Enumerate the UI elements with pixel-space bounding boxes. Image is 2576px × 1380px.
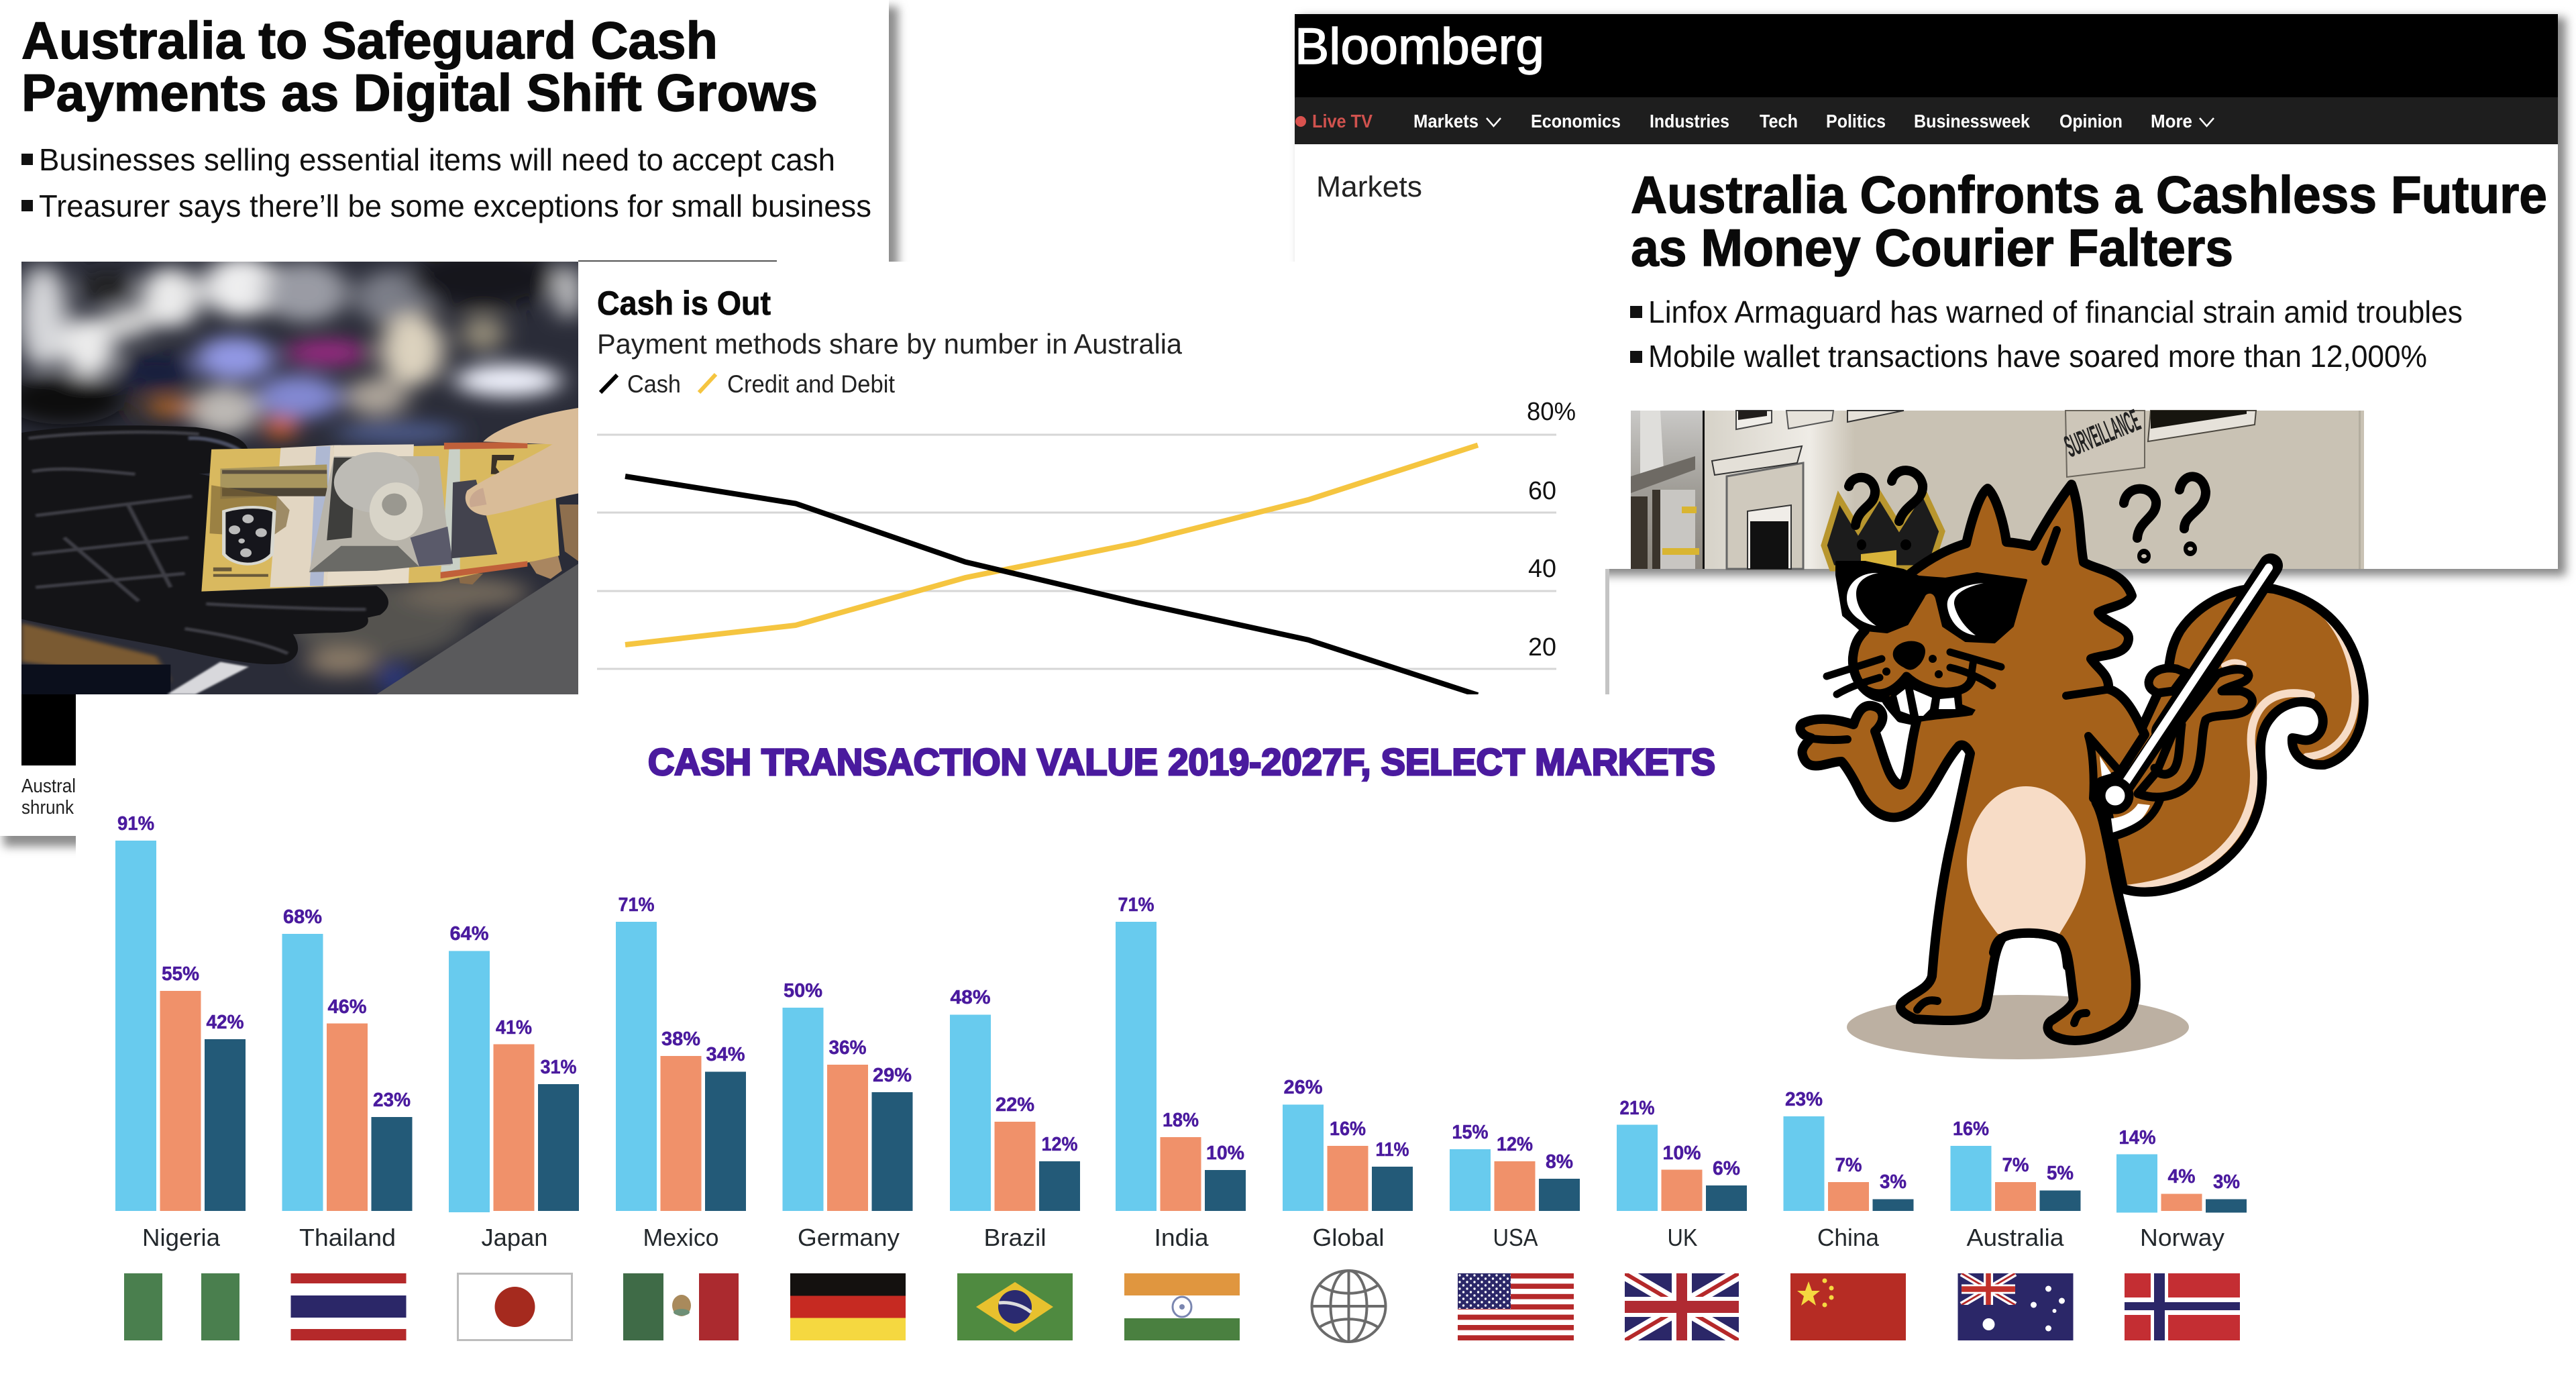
bullet text: Treasurer says there’ll be some exceptions for small business — [39, 189, 871, 223]
group: USA: 8% — [1546, 1151, 1573, 1173]
whiskers, nose and mouth — [1827, 641, 2001, 723]
navigation bar: Live TV — [1312, 111, 1373, 131]
group: Norway: 3% — [2213, 1171, 2240, 1193]
group: China: China — [1817, 1224, 1880, 1251]
right arm and hand — [2138, 668, 2252, 797]
flag: Australia — [1957, 1273, 2073, 1340]
panel: cash transaction value bar chart — [76, 694, 2576, 1380]
group: Australia: 5% — [2047, 1163, 2074, 1184]
heading: cashless future: Australia Confronts a Cashless Future — [1631, 165, 2547, 224]
gridlines and axis labels: 60 — [1528, 477, 1556, 505]
gridlines and axis labels: 80% — [1527, 398, 1576, 426]
group: Global — [1283, 1077, 1413, 1342]
group: Global: 11% — [1375, 1139, 1409, 1161]
caption fragment: shrunk — [21, 797, 74, 818]
group: Nigeria: Nigeria — [142, 1224, 221, 1251]
line: cash — [625, 476, 1478, 695]
group: Mexico: Mexico — [643, 1224, 719, 1251]
heading: cashless future: as Money Courier Falters — [1631, 218, 2233, 277]
group: Norway: 4% — [2168, 1166, 2196, 1187]
group: Mexico: 71% — [619, 894, 655, 916]
navigation bar — [1295, 97, 2558, 144]
navigation bar: Economics — [1531, 111, 1621, 131]
gridlines and axis labels: 20 — [1528, 633, 1556, 661]
group: China: 3% — [1880, 1171, 1907, 1193]
question marks — [1849, 470, 2206, 559]
body detail lines — [1808, 530, 2118, 1023]
navigation bar: Industries — [1650, 111, 1729, 131]
photo: armoured van: SURVEILLANCE — [2059, 403, 2145, 464]
group: UK: 10% — [1662, 1143, 1701, 1164]
group: UK: 21% — [1619, 1098, 1655, 1119]
group: Japan: Japan — [482, 1224, 547, 1251]
group: Norway — [2116, 1127, 2247, 1340]
chart title: Cash is Out — [597, 284, 771, 322]
sunglasses — [1837, 562, 2026, 642]
gridlines and axis labels: 40 — [1528, 555, 1556, 583]
group: Australia: 16% — [1953, 1118, 1989, 1140]
chart subtitle: Payment methods share by number in Australia — [597, 328, 1183, 360]
panel: Bloomberg Cashless Future article — [1295, 14, 2566, 576]
tail — [2106, 588, 2364, 892]
group: Japan: 64% — [449, 923, 489, 945]
photo: gloved hand passing banknote — [21, 262, 578, 694]
flag: China — [1790, 1273, 1906, 1340]
group: Brazil — [950, 987, 1080, 1340]
right hand fingers — [466, 408, 578, 515]
group: Brazil: 48% — [950, 987, 991, 1008]
group: UK: UK — [1668, 1224, 1697, 1251]
flag: Nigeria — [124, 1273, 239, 1340]
group: India: 18% — [1163, 1110, 1199, 1131]
navigation bar: Tech — [1760, 111, 1798, 131]
group: Germany: 50% — [784, 980, 822, 1002]
bullet text: Linfox Armaguard has warned of financial strain amid troubles — [1648, 295, 2463, 329]
group: USA: 15% — [1452, 1122, 1489, 1143]
group: India — [1116, 894, 1246, 1340]
group: Mexico — [616, 894, 746, 1340]
bullet text — [1630, 295, 2463, 374]
navigation bar: Markets — [1413, 111, 1479, 131]
group: Japan: 41% — [496, 1017, 532, 1039]
legend: Cash — [627, 370, 681, 398]
photo base strip below image — [21, 691, 82, 765]
flag: Brazil — [957, 1273, 1073, 1340]
group: Japan: 31% — [541, 1057, 577, 1078]
caption fragment: Austral — [21, 776, 76, 797]
caption fragment — [21, 776, 76, 818]
group: Global: 26% — [1284, 1077, 1323, 1098]
group: Global: Global — [1312, 1224, 1385, 1251]
group: Brazil: 22% — [996, 1094, 1034, 1116]
group: Thailand: Thailand — [299, 1224, 396, 1251]
line: credit and debit — [625, 445, 1478, 645]
header: Bloomberg logo bar: Bloomberg — [1295, 18, 1544, 75]
belly — [1967, 786, 2086, 934]
group: Thailand: 23% — [373, 1090, 411, 1111]
glove — [21, 425, 388, 664]
heading: safeguard cash: Australia to Safeguard Cash — [21, 11, 718, 70]
flag: Germany — [790, 1273, 906, 1340]
group: Nigeria: 42% — [207, 1012, 244, 1033]
flag: Norway — [2125, 1273, 2240, 1340]
flag: Japan — [457, 1273, 573, 1341]
group: Norway: Norway — [2140, 1224, 2224, 1251]
group: Nigeria: 55% — [162, 963, 199, 985]
group: Mexico: 38% — [661, 1028, 700, 1050]
group: Japan — [449, 923, 579, 1340]
group: UK: 6% — [1713, 1158, 1740, 1179]
group: Mexico: 34% — [706, 1044, 745, 1065]
group: Germany: 36% — [829, 1037, 867, 1059]
navigation bar: Politics — [1826, 111, 1886, 131]
gridlines and axis labels — [597, 398, 1576, 669]
group: Australia: 7% — [2002, 1155, 2029, 1176]
group: Germany: Germany — [798, 1224, 900, 1251]
right hand behind note — [529, 554, 562, 579]
group: Global: 16% — [1330, 1118, 1366, 1140]
group: Thailand: 68% — [283, 906, 322, 928]
heading: safeguard cash — [21, 11, 818, 122]
group: India: 10% — [1206, 1143, 1244, 1164]
chart heading: CASH TRANSACTION VALUE 2019-2027F, SELECT MARKETS — [648, 741, 1715, 783]
flag: Mexico — [623, 1273, 739, 1340]
navigation bar: Businessweek — [1914, 111, 2030, 131]
icon: globe — [1312, 1271, 1386, 1342]
group: Germany — [782, 980, 912, 1340]
group: Germany: 29% — [873, 1065, 912, 1086]
flag: USA — [1458, 1273, 1574, 1340]
header: Bloomberg logo bar — [1295, 14, 2558, 97]
flag: India — [1124, 1273, 1240, 1340]
flag: UK — [1625, 1273, 1739, 1340]
group: UK — [1617, 1098, 1747, 1340]
group: Thailand — [282, 906, 412, 1340]
bullet text: Businesses selling essential items will need to accept cash — [39, 142, 835, 177]
illustration: confused squirrel with sunglasses and cane — [1800, 470, 2364, 1059]
group: USA — [1450, 1122, 1580, 1340]
group: Norway: 14% — [2118, 1127, 2156, 1149]
body silhouette — [1800, 484, 2145, 1041]
heading: cashless future — [1631, 165, 2547, 277]
group: USA: USA — [1493, 1224, 1538, 1251]
photo: armoured van — [1631, 403, 2364, 569]
group: Brazil: Brazil — [983, 1224, 1046, 1251]
ground shadow — [1847, 995, 2189, 1059]
navigation bar: More — [2151, 111, 2192, 131]
panel: Australia to Safeguard Cash article — [0, 0, 898, 847]
group: Nigeria: 91% — [117, 813, 154, 835]
group: Nigeria — [115, 813, 246, 1340]
group: China: 23% — [1785, 1089, 1823, 1110]
group: Australia: Australia — [1967, 1224, 2065, 1251]
group: India: 71% — [1118, 894, 1155, 916]
badge logo — [1824, 490, 1942, 568]
group: Australia — [1951, 1118, 2081, 1340]
legend — [600, 370, 896, 398]
group: India: India — [1154, 1224, 1210, 1251]
group: Brazil: 12% — [1041, 1134, 1078, 1155]
heading: safeguard cash: Payments as Digital Shift Grows — [21, 63, 818, 122]
bullet text — [21, 142, 871, 223]
navigation bar: Opinion — [2059, 111, 2123, 131]
group: Thailand: 46% — [327, 996, 367, 1018]
section label: Markets: Markets — [1316, 170, 1422, 203]
group: China: 7% — [1835, 1155, 1862, 1176]
panel: Cash is Out line chart — [578, 260, 1609, 695]
bullet text: Mobile wallet transactions have soared more than 12,000% — [1648, 339, 2427, 374]
flag: Thailand — [291, 1273, 407, 1340]
group: China — [1783, 1089, 1913, 1340]
group: USA: 12% — [1497, 1134, 1533, 1155]
banknote — [201, 443, 559, 592]
cane — [2101, 566, 2271, 837]
legend: Credit and Debit — [727, 370, 896, 398]
